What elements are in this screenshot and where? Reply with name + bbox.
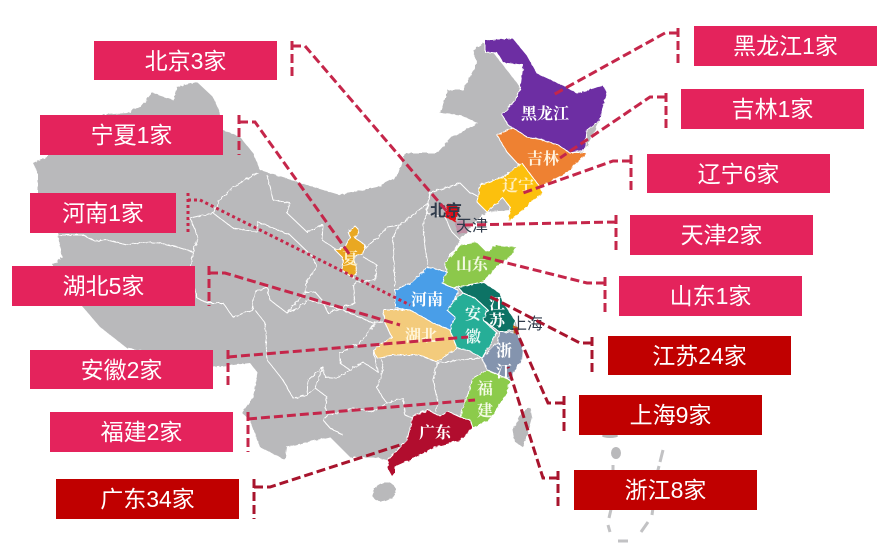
label: Anhui: 安徽2家: [81, 357, 162, 383]
map labels: 北京: [430, 201, 462, 220]
label: Henan: [30, 193, 176, 233]
label: Ningxia: [40, 115, 223, 155]
label: Hubei: [12, 266, 195, 306]
label: Liaoning: 辽宁6家: [698, 161, 779, 187]
mainland base shape: [33, 42, 600, 460]
label: Guangdong: [56, 479, 239, 519]
mainland shapes: [33, 38, 607, 505]
island: Hainan: [369, 479, 399, 505]
label: Jilin: 吉林1家: [732, 96, 813, 122]
map labels: 浙: [496, 338, 512, 361]
province: Tianjin: [455, 219, 467, 234]
label: Shanghai: 上海9家: [630, 402, 711, 428]
map labels: 苏: [489, 308, 507, 331]
leader: Tianjin: [465, 215, 616, 252]
South China Sea dashed boundary: [602, 434, 663, 541]
province: Jiangsu: [458, 282, 515, 332]
leader: Zhejiang: [508, 367, 558, 509]
province: Liaoning: [477, 163, 543, 222]
label: Tianjin: [630, 215, 813, 255]
leader: Guangdong: [254, 445, 400, 519]
map labels: 辽宁: [502, 173, 534, 196]
map labels: 夏: [342, 246, 358, 269]
label: Liaoning: [647, 154, 830, 193]
map labels: 建: [477, 398, 493, 421]
map of China: [33, 38, 663, 541]
leader: Fujian: [248, 400, 475, 452]
map labels: 河南: [411, 287, 443, 310]
leader: Jiangsu: [487, 295, 592, 373]
province: Hubei: [373, 310, 457, 362]
leader: Beijing: [292, 41, 450, 215]
leader: Anhui: [228, 337, 468, 389]
leader: Ningxia: [239, 115, 350, 255]
label: Shandong: [619, 276, 802, 316]
label: Fujian: 福建2家: [101, 419, 182, 445]
province: Guangdong: [387, 410, 473, 477]
label: Henan: 河南1家: [62, 200, 144, 226]
leader: Heilongjiang: [553, 28, 678, 95]
province: Zhejiang: [482, 332, 523, 380]
label: Hubei: 湖北5家: [63, 273, 144, 299]
label: Shandong: 山东1家: [670, 283, 751, 309]
map labels: 徽: [465, 324, 481, 347]
province: Shandong: [442, 242, 517, 288]
map labels: 天津: [456, 217, 488, 235]
label: Beijing: 北京3家: [145, 48, 226, 74]
map labels: 吉林: [527, 146, 559, 169]
label: Zhejiang: 浙江8家: [625, 477, 706, 503]
province: Jilin: [497, 128, 588, 187]
label: Tianjin: 天津2家: [681, 222, 762, 248]
leader: Hubei: [209, 266, 400, 325]
leader: Shandong: [483, 257, 605, 315]
map labels: 黑龙江: [521, 101, 569, 124]
label: Shanghai: [579, 395, 762, 435]
map labels: 江: [489, 291, 505, 314]
province: Anhui: [447, 293, 497, 358]
province: Beijing: [445, 203, 460, 222]
label: Heilongjiang: [694, 26, 877, 66]
label: Ningxia: 宁夏1家: [91, 122, 172, 148]
map labels: 上海: [511, 315, 543, 333]
province: Henan: [395, 267, 458, 330]
map labels: 安: [465, 301, 482, 324]
label: Anhui: [30, 350, 213, 389]
leader: Jilin: [560, 93, 666, 158]
label: Fujian: [50, 412, 233, 452]
map labels: 山东: [456, 252, 489, 275]
map labels: 湖北: [405, 323, 437, 346]
leader: Shanghai: [515, 328, 564, 433]
island: Taiwan: [513, 407, 532, 447]
leader: Henan: [188, 193, 410, 305]
map labels: 江: [496, 359, 512, 382]
province: Ningxia: [335, 226, 365, 278]
label: Jiangsu: 江苏24家: [652, 343, 747, 369]
map labels: 福: [477, 376, 493, 399]
province: Shanghai: [513, 325, 519, 334]
label: Zhejiang: [574, 470, 757, 510]
label: Jilin: [681, 89, 864, 129]
leader: Liaoning: [523, 155, 631, 193]
label: Guangdong: 广东34家: [100, 486, 195, 512]
label: Jiangsu: [608, 336, 791, 375]
label: Heilongjiang: 黑龙江1家: [733, 33, 838, 59]
province: Fujian: [460, 370, 510, 428]
map labels: [342, 101, 569, 443]
province: Heilongjiang: [485, 38, 607, 153]
map labels: 广东: [419, 420, 452, 443]
province borders: [58, 173, 482, 435]
label: Beijing: [94, 41, 277, 80]
